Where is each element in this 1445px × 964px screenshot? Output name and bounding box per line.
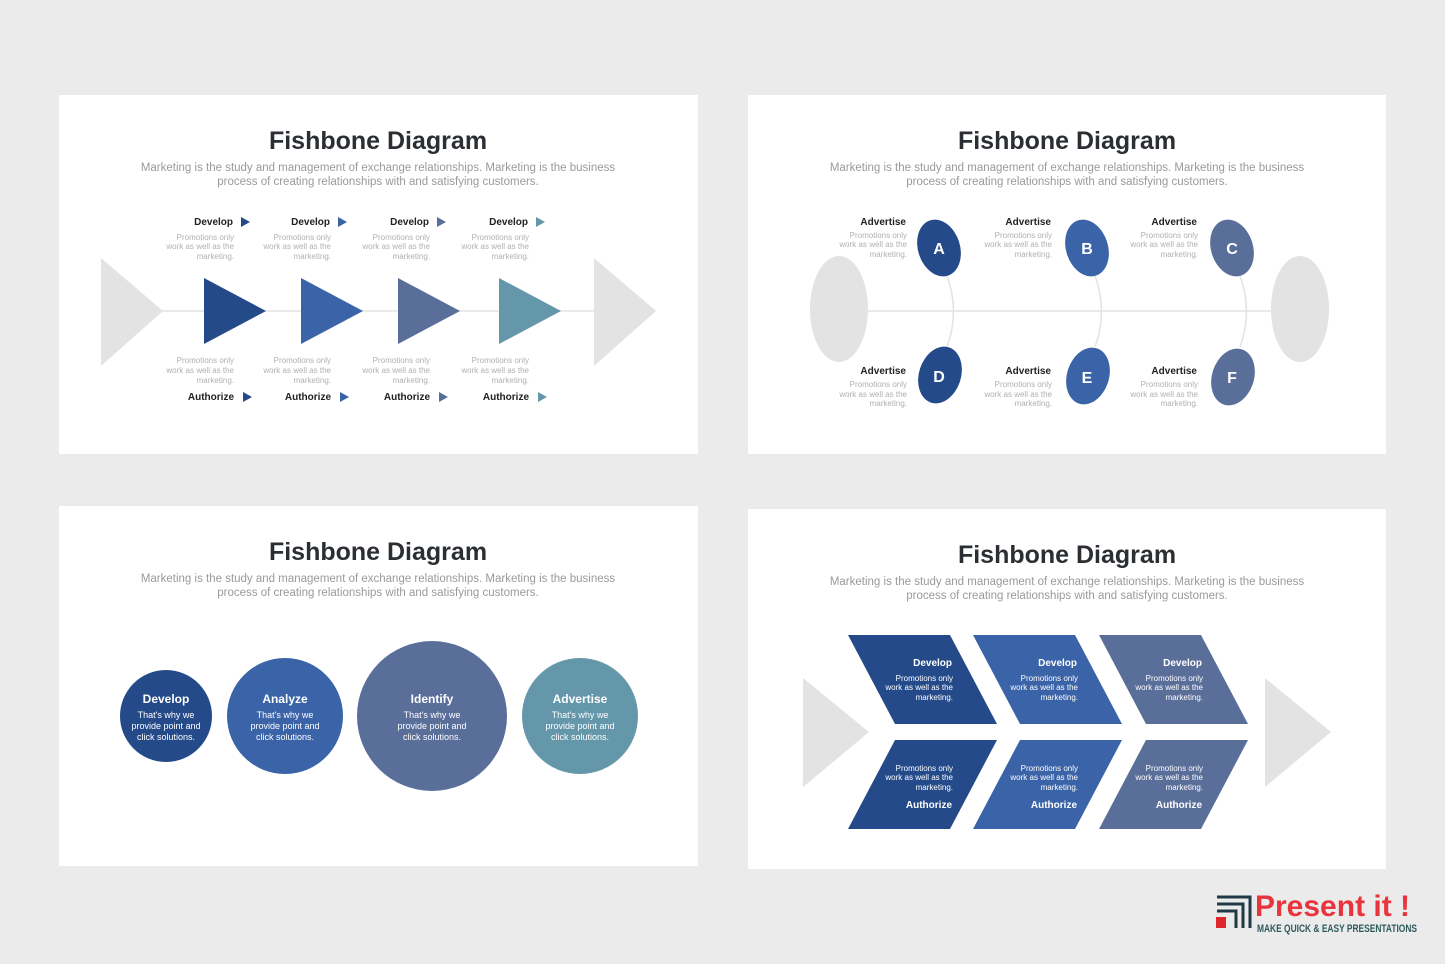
chevron column 3: work as well as the xyxy=(1134,683,1204,692)
chevron column 2 xyxy=(973,635,1122,829)
circle: Analyze: provide point and xyxy=(250,721,320,731)
circle: Advertise xyxy=(522,658,638,774)
circle: Analyze: click solutions. xyxy=(256,732,314,742)
subtitle: Marketing is the study and management of exchange relationships. Marketing is the business xyxy=(830,576,1304,588)
labels column 3: Promotions only xyxy=(373,233,430,242)
labels: marketing. xyxy=(1015,399,1052,408)
labels: work as well as the xyxy=(1129,390,1199,399)
chevron column 3: marketing. xyxy=(1166,693,1203,702)
circle: Identify: That's why we xyxy=(404,710,460,720)
labels column 1: Promotions only xyxy=(177,233,234,242)
triangles row xyxy=(204,278,561,344)
bubbles A-F: A xyxy=(933,241,945,258)
labels: Advertise xyxy=(1005,217,1051,228)
chevron column 2: Promotions only xyxy=(1021,674,1078,683)
bubbles A-F: F xyxy=(1227,370,1237,387)
subtitle xyxy=(141,162,615,188)
panel: ellipse fishbone xyxy=(748,95,1386,454)
labels column 2: marketing. xyxy=(294,376,331,385)
subtitle xyxy=(830,162,1304,188)
circle: Identify xyxy=(357,641,507,791)
chevron column 3: Promotions only xyxy=(1146,764,1203,773)
circle: Advertise: provide point and xyxy=(545,721,615,731)
chevron column 1: Authorize xyxy=(906,800,952,811)
labels: Promotions only xyxy=(1141,231,1198,240)
subtitle: process of creating relationships with and satisfying customers. xyxy=(906,590,1228,602)
labels: Promotions only xyxy=(1141,380,1198,389)
chevron column 1: Develop xyxy=(913,658,952,669)
labels: marketing. xyxy=(870,250,907,259)
chevron column 2: work as well as the xyxy=(1009,773,1079,782)
chevron column 1: marketing. xyxy=(916,783,953,792)
labels column 4: work as well as the xyxy=(460,366,530,375)
circle: Identify: Identify xyxy=(411,692,454,706)
title: Fishbone Diagram xyxy=(269,127,487,155)
circle: Develop: Develop xyxy=(143,692,189,706)
panel: chevrons xyxy=(748,509,1386,869)
labels: Advertise xyxy=(860,217,906,228)
chevron column 1: marketing. xyxy=(916,693,953,702)
labels column 2: work as well as the xyxy=(262,242,332,251)
chevron column 3: marketing. xyxy=(1166,783,1203,792)
circle: Develop xyxy=(120,670,212,762)
labels: Promotions only xyxy=(995,380,1052,389)
labels: Promotions only xyxy=(995,231,1052,240)
icon: grey head triangle xyxy=(803,678,869,787)
circle: Identify: click solutions. xyxy=(403,732,461,742)
chevron column 1: work as well as the xyxy=(884,773,954,782)
labels column 1: work as well as the xyxy=(165,366,235,375)
labels column 3: marketing. xyxy=(393,376,430,385)
subtitle xyxy=(830,576,1304,602)
labels: marketing. xyxy=(1161,250,1198,259)
labels column 4: Promotions only xyxy=(472,233,529,242)
circle: Develop: provide point and xyxy=(131,721,201,731)
labels: marketing. xyxy=(870,399,907,408)
labels: Advertise xyxy=(860,366,906,377)
subtitle: Marketing is the study and management of exchange relationships. Marketing is the business xyxy=(830,162,1304,174)
bubbles A-F xyxy=(910,214,1262,411)
labels: work as well as the xyxy=(1129,240,1199,249)
subtitle: process of creating relationships with and satisfying customers. xyxy=(906,176,1228,188)
chevron column 2: Develop xyxy=(1038,658,1077,669)
labels column 3: Promotions only xyxy=(373,356,430,365)
labels column 1: Authorize xyxy=(188,392,234,403)
labels column 4 xyxy=(460,217,547,403)
circle: Analyze xyxy=(227,658,343,774)
chevron column 2: work as well as the xyxy=(1009,683,1079,692)
bubbles A-F: D xyxy=(933,369,945,386)
bubbles A-F: C xyxy=(1226,241,1238,258)
labels column 3: work as well as the xyxy=(361,242,431,251)
labels column 4: Authorize xyxy=(483,392,529,403)
chevron column 3: Develop xyxy=(1163,658,1202,669)
labels column 4: Develop xyxy=(489,217,528,228)
labels: marketing. xyxy=(1015,250,1052,259)
labels column 3: work as well as the xyxy=(361,366,431,375)
labels column 4: work as well as the xyxy=(460,242,530,251)
labels: Advertise xyxy=(1151,366,1197,377)
subtitle xyxy=(141,573,615,599)
chevron column 1: work as well as the xyxy=(884,683,954,692)
labels: Advertise xyxy=(1005,366,1051,377)
chevron column 2: marketing. xyxy=(1041,693,1078,702)
circle: Advertise: That's why we xyxy=(552,710,608,720)
labels column 1: work as well as the xyxy=(165,242,235,251)
subtitle: process of creating relationships with and satisfying customers. xyxy=(217,176,539,188)
panel: triangles fishbone xyxy=(59,95,698,454)
chevron column 3: Authorize xyxy=(1156,800,1202,811)
labels column 3: marketing. xyxy=(393,252,430,261)
bubbles A-F: B xyxy=(1081,241,1093,258)
labels: Promotions only xyxy=(850,380,907,389)
circle: Develop: That's why we xyxy=(138,710,194,720)
labels: Promotions only xyxy=(850,231,907,240)
labels: work as well as the xyxy=(838,240,908,249)
logo xyxy=(1216,890,1417,935)
bubbles A-F: E xyxy=(1082,370,1093,387)
title: Fishbone Diagram xyxy=(958,127,1176,155)
labels column 2: Promotions only xyxy=(274,233,331,242)
labels column 4: Promotions only xyxy=(472,356,529,365)
title: Fishbone Diagram xyxy=(269,538,487,566)
labels column 2: work as well as the xyxy=(262,366,332,375)
labels column 1 xyxy=(165,217,252,403)
labels column 3 xyxy=(361,217,448,403)
chevron column 3: work as well as the xyxy=(1134,773,1204,782)
labels column 4: marketing. xyxy=(492,376,529,385)
labels: Advertise xyxy=(1151,217,1197,228)
chevron column 1 xyxy=(848,635,997,829)
chevron column 1: Promotions only xyxy=(896,674,953,683)
labels column 1: Promotions only xyxy=(177,356,234,365)
labels column 1: marketing. xyxy=(197,376,234,385)
circle: Analyze: That's why we xyxy=(257,710,313,720)
labels column 3: Authorize xyxy=(384,392,430,403)
labels column 2: Develop xyxy=(291,217,330,228)
circle: Develop: click solutions. xyxy=(137,732,195,742)
labels column 2: marketing. xyxy=(294,252,331,261)
circle: Analyze: Analyze xyxy=(262,692,308,706)
circle: Advertise: click solutions. xyxy=(551,732,609,742)
subtitle: Marketing is the study and management of exchange relationships. Marketing is the business xyxy=(141,162,615,174)
labels column 2: Promotions only xyxy=(274,356,331,365)
labels: marketing. xyxy=(1161,399,1198,408)
subtitle: process of creating relationships with and satisfying customers. xyxy=(217,587,539,599)
labels: work as well as the xyxy=(983,390,1053,399)
labels column 4: marketing. xyxy=(492,252,529,261)
labels column 1: marketing. xyxy=(197,252,234,261)
logo: Present it ! xyxy=(1255,890,1410,923)
labels column 1: Develop xyxy=(194,217,233,228)
icon: grey tail triangle right xyxy=(594,258,656,366)
chevron column 2: marketing. xyxy=(1041,783,1078,792)
circle: Advertise: Advertise xyxy=(553,692,608,706)
chevron column 2: Promotions only xyxy=(1021,764,1078,773)
labels column 3: Develop xyxy=(390,217,429,228)
circle: Identify: provide point and xyxy=(397,721,467,731)
icon: grey head ellipse xyxy=(810,256,868,362)
labels column 2: Authorize xyxy=(285,392,331,403)
chevron column 3 xyxy=(1099,635,1248,829)
labels column 2 xyxy=(262,217,349,403)
labels: work as well as the xyxy=(838,390,908,399)
icon: grey tail triangle xyxy=(1265,678,1331,787)
chevron column 3: Promotions only xyxy=(1146,674,1203,683)
icon: grey tail ellipse xyxy=(1271,256,1329,362)
subtitle: Marketing is the study and management of exchange relationships. Marketing is the business xyxy=(141,573,615,585)
panel: circles xyxy=(59,506,698,866)
title: Fishbone Diagram xyxy=(958,541,1176,569)
icon: grey head triangle left xyxy=(101,258,163,366)
labels: work as well as the xyxy=(983,240,1053,249)
labels xyxy=(838,217,1199,408)
chevron column 2: Authorize xyxy=(1031,800,1077,811)
chevron column 1: Promotions only xyxy=(896,764,953,773)
